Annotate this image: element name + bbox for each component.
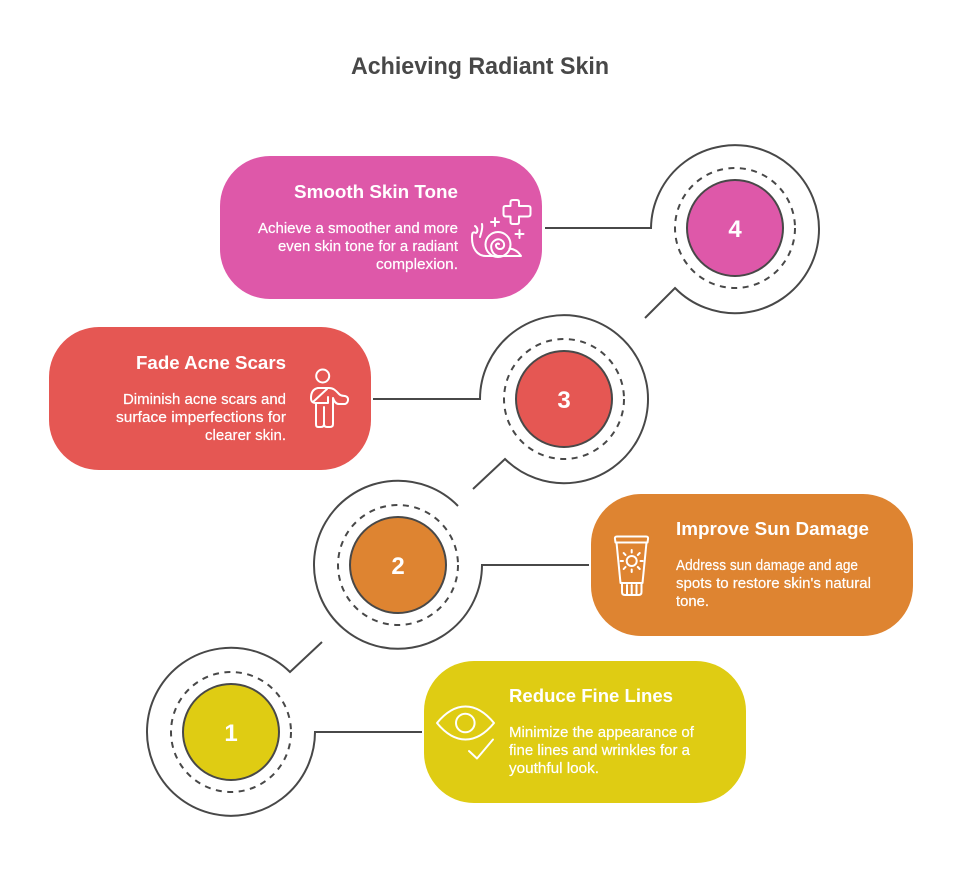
step 2: improve sun damage bbox=[314, 481, 913, 649]
panel: smooth skin tone: complexion. bbox=[376, 257, 458, 273]
panel: reduce fine lines bbox=[424, 661, 746, 803]
step 3: fade acne scars bbox=[49, 315, 648, 489]
panel: improve sun damage: tone. bbox=[676, 594, 709, 610]
ring: step 1 bbox=[147, 642, 422, 816]
title: Achieving Radiant Skin bbox=[351, 53, 609, 80]
ring: step 2 bbox=[314, 481, 589, 649]
icon: sunscreen tube bbox=[615, 536, 648, 595]
ring: step 1: 1 bbox=[224, 720, 238, 747]
panel: improve sun damage: Address sun damage and age bbox=[676, 558, 858, 574]
panel: smooth skin tone: Smooth Skin Tone bbox=[294, 182, 458, 202]
ring: step 4: 4 bbox=[728, 216, 742, 243]
step 4: smooth skin tone bbox=[220, 145, 819, 318]
panel: fade acne scars bbox=[49, 327, 371, 470]
icon: snail with plus signs bbox=[472, 200, 530, 257]
panel: fade acne scars: Fade Acne Scars bbox=[136, 353, 286, 373]
panel: fade acne scars: surface imperfections for bbox=[116, 410, 286, 426]
icon: person with arm sling bbox=[311, 370, 348, 427]
panel: smooth skin tone: Achieve a smoother and more bbox=[258, 221, 458, 237]
ring: step 3 bbox=[373, 315, 648, 489]
panel: improve sun damage: spots to restore skin's natural bbox=[676, 576, 871, 592]
panel: fade acne scars: clearer skin. bbox=[205, 428, 286, 444]
ring: step 4 bbox=[545, 145, 819, 318]
panel: smooth skin tone: even skin tone for a radiant bbox=[278, 239, 458, 255]
panel: improve sun damage bbox=[591, 494, 913, 636]
panel: smooth skin tone bbox=[220, 156, 542, 299]
panel: reduce fine lines: youthful look. bbox=[509, 761, 599, 777]
ring: step 3: 3 bbox=[557, 387, 571, 414]
panel: reduce fine lines: fine lines and wrinkles for a bbox=[509, 743, 691, 759]
icon: eye with check bbox=[437, 706, 494, 758]
ring: step 2: 2 bbox=[391, 553, 405, 580]
panel: reduce fine lines: Minimize the appearance of bbox=[509, 725, 695, 741]
panel: improve sun damage: Improve Sun Damage bbox=[676, 519, 869, 539]
panel: reduce fine lines: Reduce Fine Lines bbox=[509, 686, 673, 706]
step 1: reduce fine lines bbox=[147, 642, 746, 816]
panel: fade acne scars: Diminish acne scars and bbox=[123, 392, 286, 408]
